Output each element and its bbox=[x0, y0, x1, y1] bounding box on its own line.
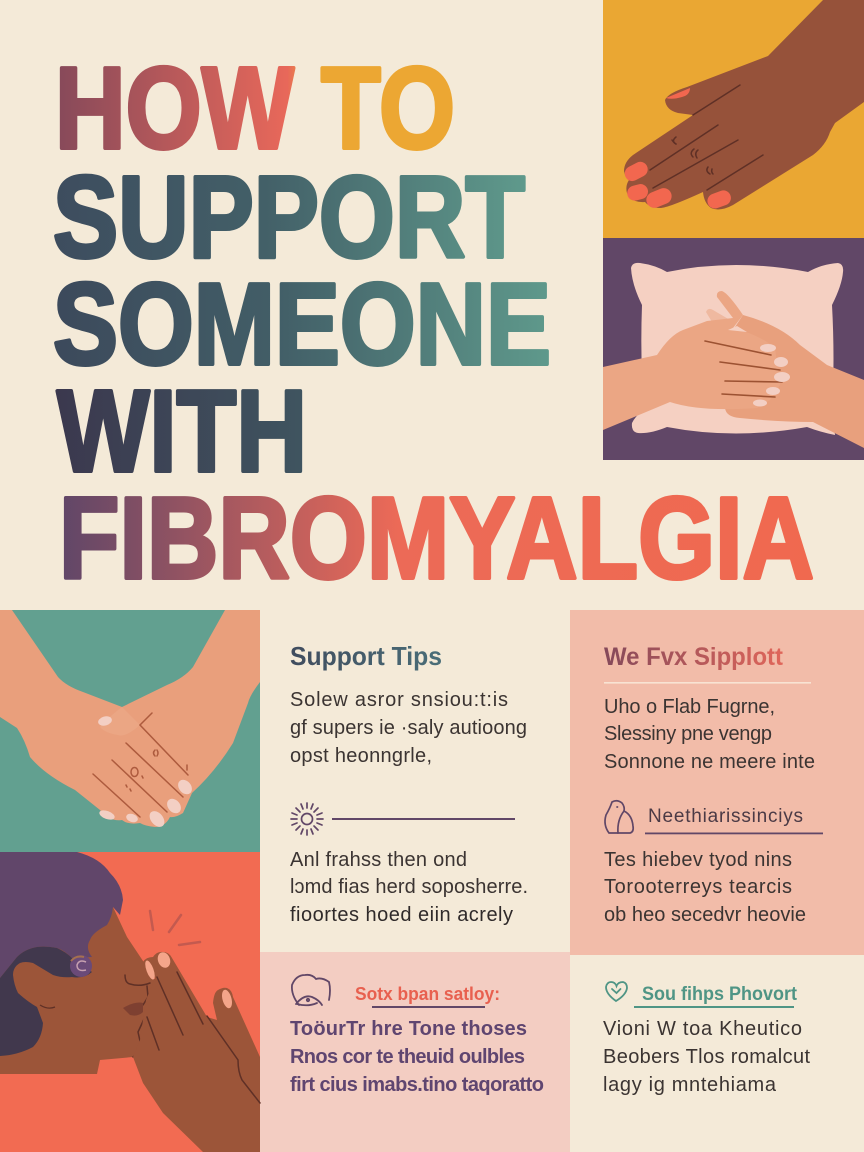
text block: second note: Torooterreys tearcis bbox=[604, 876, 792, 898]
finger lines and nails bbox=[93, 707, 195, 830]
icon: two figures bbox=[605, 801, 633, 833]
text block: purple note: firt cius imabs.tino taqoratto bbox=[290, 1074, 544, 1096]
text block: first note bbox=[604, 696, 815, 773]
text block: first tip bbox=[290, 689, 527, 767]
text block: second tip: fioortes hoed eiin acrely bbox=[290, 904, 513, 926]
text block: second note: Tes hiebev tyod nins bbox=[604, 849, 792, 871]
heading: we fvx sipplott: We Fvx Sipplott bbox=[604, 643, 784, 671]
text block: first tip: opst heonngrle, bbox=[290, 745, 432, 767]
finger lines and nails bbox=[143, 950, 260, 1103]
icon: ear crease bbox=[40, 1005, 55, 1008]
label: neethiarissinciys: Neethiarissinciys bbox=[648, 806, 803, 827]
icon: left hand bbox=[603, 291, 780, 430]
title: WITH bbox=[57, 366, 307, 496]
text block: closing note: Vioni W toa Kheutico bbox=[603, 1018, 802, 1040]
icon: hair bbox=[0, 852, 123, 978]
panel: hand on yellow bbox=[603, 0, 864, 238]
icon: heart bbox=[606, 982, 627, 1001]
icon: emphasis marks bbox=[150, 911, 200, 945]
finger lines and nails bbox=[705, 341, 790, 406]
text block: purple note bbox=[290, 1018, 544, 1096]
icon: sun bbox=[291, 803, 323, 835]
text block: purple note: Rnos cor te theuid oulbles bbox=[290, 1046, 525, 1068]
text block: first note: Slessiny pne vengp bbox=[604, 723, 772, 745]
title bbox=[53, 43, 814, 603]
text block: second tip bbox=[290, 849, 528, 926]
icon: pillow gap bbox=[728, 326, 747, 332]
icon: face bbox=[0, 907, 155, 1074]
icon: back finger bbox=[706, 309, 730, 322]
finger lines and nails bbox=[622, 85, 763, 211]
panel: sou fihps phovort bbox=[570, 956, 864, 1152]
icon: nose and lips bbox=[123, 975, 150, 1057]
icon: hand bbox=[133, 952, 260, 1152]
title: SOMEONE bbox=[53, 259, 551, 389]
text block: first note: Sonnone ne meere inte bbox=[604, 751, 815, 773]
panel: support tips bbox=[260, 610, 570, 952]
heading: support tips: Support Tips bbox=[290, 641, 442, 671]
icon: right hand bbox=[725, 315, 864, 448]
text block: second tip: lɔmd fias herd soposherre. bbox=[290, 876, 528, 898]
icon: hand bbox=[624, 0, 864, 209]
text block: purple note: ToöurTr hre Tone thoses bbox=[290, 1018, 527, 1040]
text block: closing note: Beobers Tlos romalcut bbox=[603, 1046, 810, 1068]
text block: first note: Uho o Flab Fugrne, bbox=[604, 696, 775, 718]
panel: whispering face on coral bbox=[0, 852, 260, 1152]
icon: cloud with eye bbox=[292, 975, 330, 1005]
panel: clasped hands on teal bbox=[0, 610, 260, 852]
icon: clasped hands bbox=[0, 610, 260, 827]
title: SUPPORT bbox=[53, 152, 525, 282]
text block: second tip: Anl frahss then ond bbox=[290, 849, 467, 871]
text block: closing note bbox=[603, 1018, 810, 1096]
text block: second note: ob heo secedvr heovie bbox=[604, 904, 806, 926]
heading: sou fihps phovort: Sou fihps Phovort bbox=[642, 984, 798, 1005]
icon: earring curl bbox=[70, 955, 92, 977]
text block: closing note: lagy ig mntehiama bbox=[603, 1074, 777, 1096]
text block: first tip: Solew asror snsiou:t:is bbox=[290, 689, 508, 711]
panel: sotx bpan satloy bbox=[260, 952, 570, 1152]
text block: second note bbox=[604, 849, 806, 926]
panel: hands on pillow bbox=[603, 238, 864, 460]
panel: we fvx sipplott bbox=[570, 610, 864, 955]
title: HOW TO bbox=[55, 43, 455, 173]
text block: first tip: gf supers ie ·saly autioong bbox=[290, 717, 527, 739]
icon: dark hair bbox=[0, 947, 92, 1056]
icon: pillow bbox=[631, 263, 843, 435]
heading: sotx bpan satloy: Sotx bpan satloy: bbox=[355, 984, 500, 1004]
